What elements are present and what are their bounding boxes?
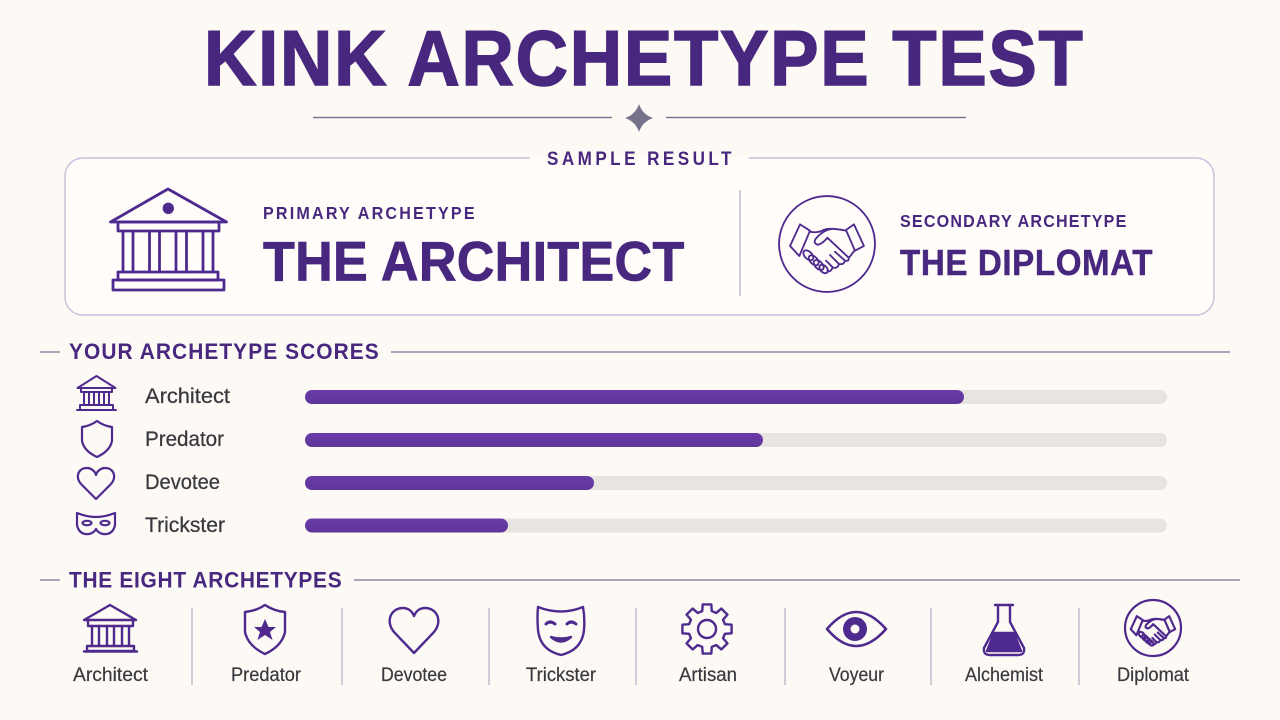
archetype: devotee: [381, 608, 447, 686]
archetype: trickster: Trickster: [526, 665, 597, 686]
panel: sample result: [65, 148, 1214, 315]
archetype: voyeur: [827, 612, 886, 686]
heading: sample result: SAMPLE RESULT: [547, 148, 732, 169]
icon: large temple: [110, 189, 226, 290]
icon: shield with star: [245, 605, 285, 654]
archetype: devotee: Devotee: [381, 665, 447, 686]
primary archetype name: THE ARCHITECT: [263, 231, 684, 293]
score row: trickster: Trickster: [145, 514, 225, 537]
archetype: diplomat: [1117, 600, 1190, 686]
archetype: trickster: [526, 607, 597, 686]
score row: devotee: Devotee: [145, 471, 220, 494]
score row: trickster: [77, 513, 1167, 537]
icon: theatre mask: [538, 607, 584, 655]
archetype: alchemist: Alchemist: [965, 665, 1044, 686]
score row: predator: Predator: [145, 428, 224, 451]
icon: handshake in circle: [779, 196, 875, 292]
archetype: alchemist: [965, 605, 1044, 686]
score row: predator: [82, 421, 1167, 457]
secondary archetype name: THE DIPLOMAT: [900, 244, 1153, 283]
archetype strip: [73, 600, 1190, 686]
heading: the eight archetypes: THE EIGHT ARCHETYPES: [69, 568, 342, 593]
archetype: architect: [73, 605, 149, 686]
archetype: artisan: [679, 604, 737, 686]
icon: eye: [827, 612, 886, 646]
archetype: predator: [231, 605, 302, 686]
icon: temple: [84, 605, 137, 652]
archetype: architect: Architect: [73, 665, 149, 686]
icon: heart: [78, 468, 114, 499]
title divider with star: [313, 104, 966, 132]
icon: temple: [77, 376, 116, 410]
icon: heart: [390, 608, 438, 653]
heading: your archetype scores: YOUR ARCHETYPE SCORES: [69, 340, 379, 364]
score row: architect: [77, 376, 1167, 410]
icon: mask: [77, 513, 115, 534]
icon: shield: [82, 421, 112, 457]
title: KINK ARCHETYPE TEST: [204, 15, 1083, 102]
icon: gear: [682, 604, 732, 654]
icon: flask: [984, 605, 1024, 655]
icon: handshake in circle: [1125, 600, 1181, 656]
primary archetype label: PRIMARY ARCHETYPE: [263, 203, 475, 223]
archetype: voyeur: Voyeur: [829, 665, 885, 686]
archetype: artisan: Artisan: [679, 665, 737, 686]
score row: architect: Architect: [145, 385, 230, 408]
archetype: predator: Predator: [231, 665, 302, 686]
score row: devotee: [78, 468, 1167, 499]
archetype: diplomat: Diplomat: [1117, 665, 1190, 686]
secondary archetype label: SECONDARY ARCHETYPE: [900, 211, 1126, 231]
